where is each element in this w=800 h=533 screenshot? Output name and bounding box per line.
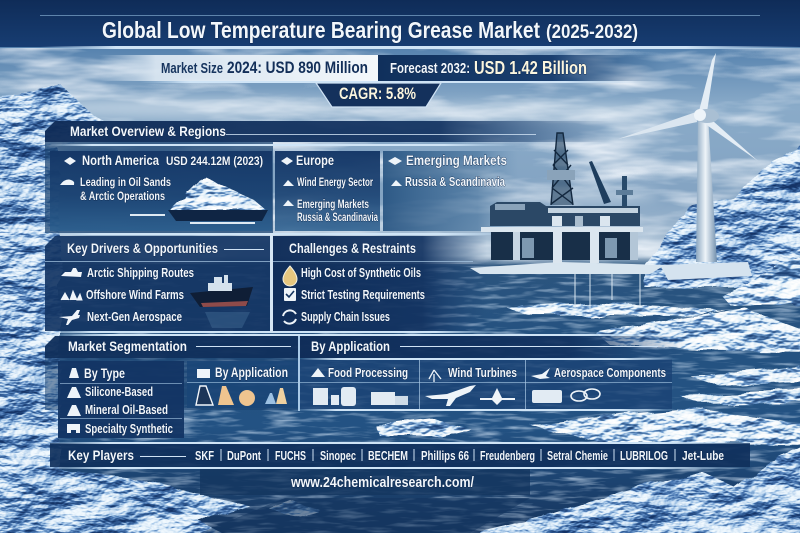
challenge: supply chain issues: Supply Chain Issues <box>301 309 390 324</box>
website footer: www.24chemicalresearch.com/ <box>290 474 475 491</box>
sub-panel: by application icons <box>187 361 298 408</box>
driver: next-gen aerospace: Next-Gen Aerospace <box>87 309 182 324</box>
CAGR badge <box>316 83 441 107</box>
driver: arctic shipping routes <box>61 265 194 280</box>
sub-panel: by type: Silicone-Based <box>85 384 153 399</box>
company list: BECHEM <box>368 449 408 463</box>
heading: Market Overview & Regions <box>70 123 226 139</box>
company list: SKF <box>195 449 214 463</box>
challenge: supply chain issues <box>283 309 390 324</box>
company list: Phillips 66 <box>421 449 469 463</box>
sub-panel: europe <box>275 151 380 231</box>
sub-panel: europe: Emerging Markets <box>297 199 369 211</box>
company list: Freudenberg <box>480 449 535 463</box>
sub-panel: europe: Wind Energy Sector <box>297 177 373 189</box>
sub-panel: by type: Specialty Synthetic <box>85 421 173 436</box>
forecast value: USD 1.42 Billion <box>474 58 587 78</box>
panel: challenges and restraints <box>270 233 487 332</box>
panel: by application <box>298 336 685 411</box>
company list: Jet-Lube <box>682 449 724 463</box>
sub-panel: by type: Mineral Oil-Based <box>85 402 168 417</box>
panel: key players <box>35 442 775 469</box>
heading: Market Segmentation <box>68 338 187 354</box>
panel: market overview and regions <box>45 121 610 233</box>
sub-panel: by type <box>58 361 184 438</box>
company list <box>195 449 724 463</box>
title banner <box>0 0 800 49</box>
sub-panel: north america: Leading in Oil Sands <box>80 177 171 189</box>
title years: (2025-2032) <box>546 22 638 43</box>
segment: aerospace components: Aerospace Components <box>554 365 666 380</box>
icon: offshore oil rig <box>470 133 665 312</box>
segment: food processing: Food Processing <box>328 365 408 380</box>
challenge: high cost of synthetic oils <box>283 265 421 286</box>
market size 2024: 2024: USD 890 Million <box>227 58 368 77</box>
website footer <box>200 469 530 495</box>
CAGR value: CAGR: 5.8% <box>339 84 416 103</box>
sub-panel: by application icons: By Application <box>215 364 288 380</box>
segment: wind turbines <box>425 365 517 406</box>
sub-panel: north america <box>50 151 272 231</box>
segment: food processing <box>311 365 408 406</box>
company list: DuPont <box>227 449 262 463</box>
company list: LUBRILOG <box>620 449 668 463</box>
sub-panel: emerging markets <box>383 151 518 231</box>
sub-panel: by type: By Type <box>84 365 125 381</box>
sub-panel: north america: North America <box>82 152 159 168</box>
challenge: high cost of synthetic oils: High Cost of Synthetic Oils <box>301 265 421 280</box>
panel: key drivers and opportunities <box>45 233 515 333</box>
company list: Setral Chemie <box>547 449 608 463</box>
challenge: strict testing requirements <box>284 287 425 302</box>
sub-panel: europe: Russia & Scandinavia <box>297 212 378 224</box>
driver: next-gen aerospace <box>59 309 182 325</box>
panel: market segmentation <box>45 334 685 438</box>
sub-panel: emerging markets: Emerging Markets <box>406 152 507 168</box>
market size strip <box>100 55 668 83</box>
driver: offshore wind farms: Offshore Wind Farms <box>86 287 184 302</box>
heading: By Application <box>311 338 390 354</box>
sub-panel: emerging markets: Russia & Scandinavia <box>405 174 506 189</box>
driver: offshore wind farms <box>61 287 184 302</box>
market size value: Market Size <box>161 60 223 77</box>
heading: Key Drivers & Opportunities <box>67 240 218 256</box>
sub-panel: europe: Europe <box>296 152 334 168</box>
challenge: strict testing requirements: Strict Testing Requirements <box>301 287 425 302</box>
company list: Sinopec <box>320 449 356 463</box>
icon: wind turbine <box>618 53 758 280</box>
sub-panel: north america: USD 244.12M (2023) <box>166 156 263 168</box>
segment: aerospace components <box>531 365 666 403</box>
segment: wind turbines: Wind Turbines <box>448 365 517 380</box>
driver: arctic shipping routes: Arctic Shipping Routes <box>87 265 194 280</box>
sub-panel: north america: & Arctic Operations <box>80 191 165 203</box>
title: Global Low Temperature Bearing Grease Market <box>102 17 540 43</box>
forecast label: Forecast 2032: <box>390 60 470 77</box>
company list: FUCHS <box>275 449 306 463</box>
heading: Challenges & Restraints <box>289 240 416 256</box>
heading: Key Players <box>68 447 134 463</box>
ship illustration <box>190 275 253 328</box>
